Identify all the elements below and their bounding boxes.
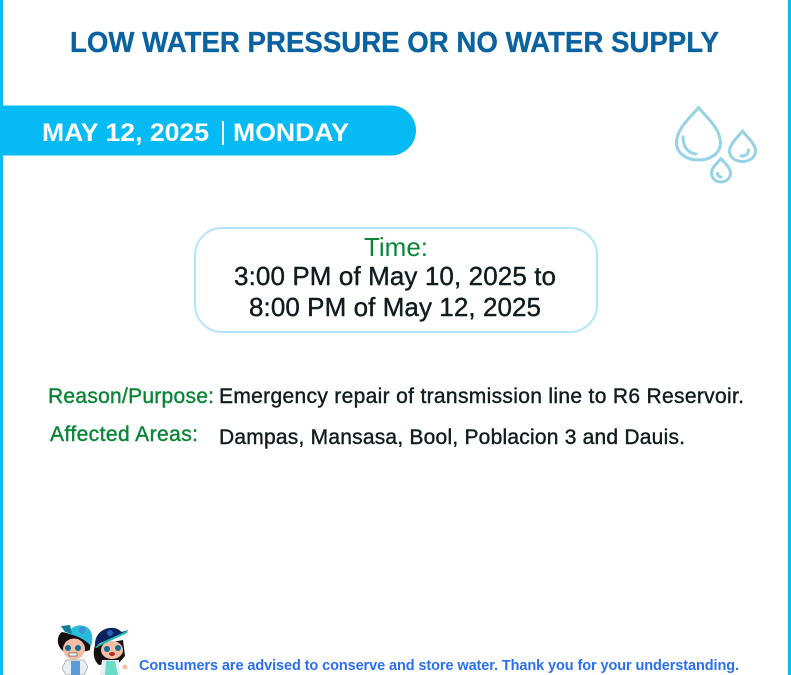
- mascot: boy: [58, 625, 92, 675]
- time range: 8:00 PM of May 12, 2025: [249, 292, 541, 322]
- affected areas row: [50, 423, 685, 449]
- affected areas label: Affected Areas:: [50, 423, 198, 446]
- icon: water drops: [676, 108, 756, 182]
- reason text: Emergency repair of transmission line to R6 Reservoir.: [219, 385, 744, 408]
- date banner: [0, 106, 416, 156]
- reason row: [48, 385, 744, 408]
- banner date text: MAY 12, 2025: [42, 119, 209, 147]
- time range: 3:00 PM of May 10, 2025 to: [234, 261, 556, 291]
- time box: [195, 228, 597, 332]
- title: LOW WATER PRESSURE OR NO WATER SUPPLY: [70, 27, 719, 59]
- affected areas text: Dampas, Mansasa, Bool, Poblacion 3 and Dauis.: [219, 426, 685, 449]
- mascot: girl: [94, 628, 128, 675]
- mascots: [58, 625, 128, 675]
- reason label: Reason/Purpose:: [48, 385, 214, 408]
- time range: [234, 261, 556, 322]
- banner date text: [42, 119, 349, 147]
- time label: Time:: [364, 232, 428, 262]
- footer advisory: Consumers are advised to conserve and store water. Thank you for your understanding.: [139, 658, 739, 674]
- banner date text: MONDAY: [233, 119, 349, 147]
